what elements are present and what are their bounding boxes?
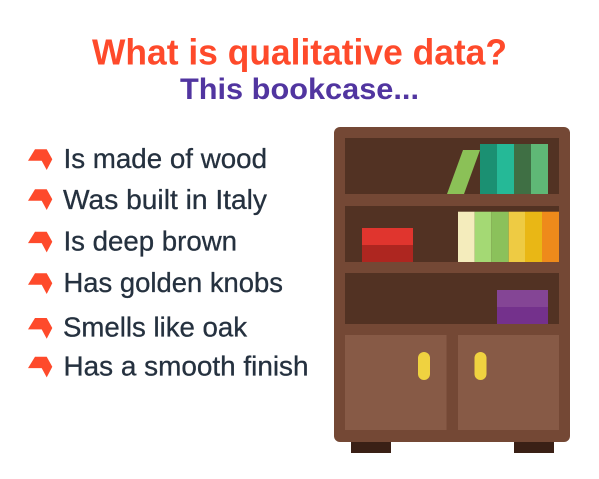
lower shelf — [345, 273, 559, 324]
left cabinet door — [345, 335, 446, 430]
right cabinet door — [458, 335, 559, 430]
middle shelf — [345, 206, 559, 262]
stacked red books — [362, 228, 413, 262]
list of qualities — [28, 143, 308, 382]
bookcase frame — [334, 127, 570, 442]
bookcase illustration — [334, 127, 570, 453]
leaning green book — [447, 150, 480, 194]
title: What is qualitative data? — [92, 32, 507, 72]
right knob — [474, 352, 486, 380]
upright green books — [480, 144, 548, 194]
bookcase feet — [351, 440, 554, 453]
list item: smooth finish: Has a smooth finish — [64, 351, 308, 382]
left knob — [418, 352, 430, 380]
list item: deep brown: Is deep brown — [64, 226, 237, 257]
list item: smells like oak: Smells like oak — [63, 312, 248, 343]
top shelf — [345, 138, 559, 194]
stacked purple books — [497, 290, 548, 324]
subtitle: This bookcase... — [180, 73, 419, 106]
row of colourful books — [458, 212, 559, 262]
list item: golden knobs: Has golden knobs — [64, 267, 283, 298]
list item: made of wood: Is made of wood — [64, 143, 267, 174]
list item: built in Italy: Was built in Italy — [63, 184, 267, 215]
